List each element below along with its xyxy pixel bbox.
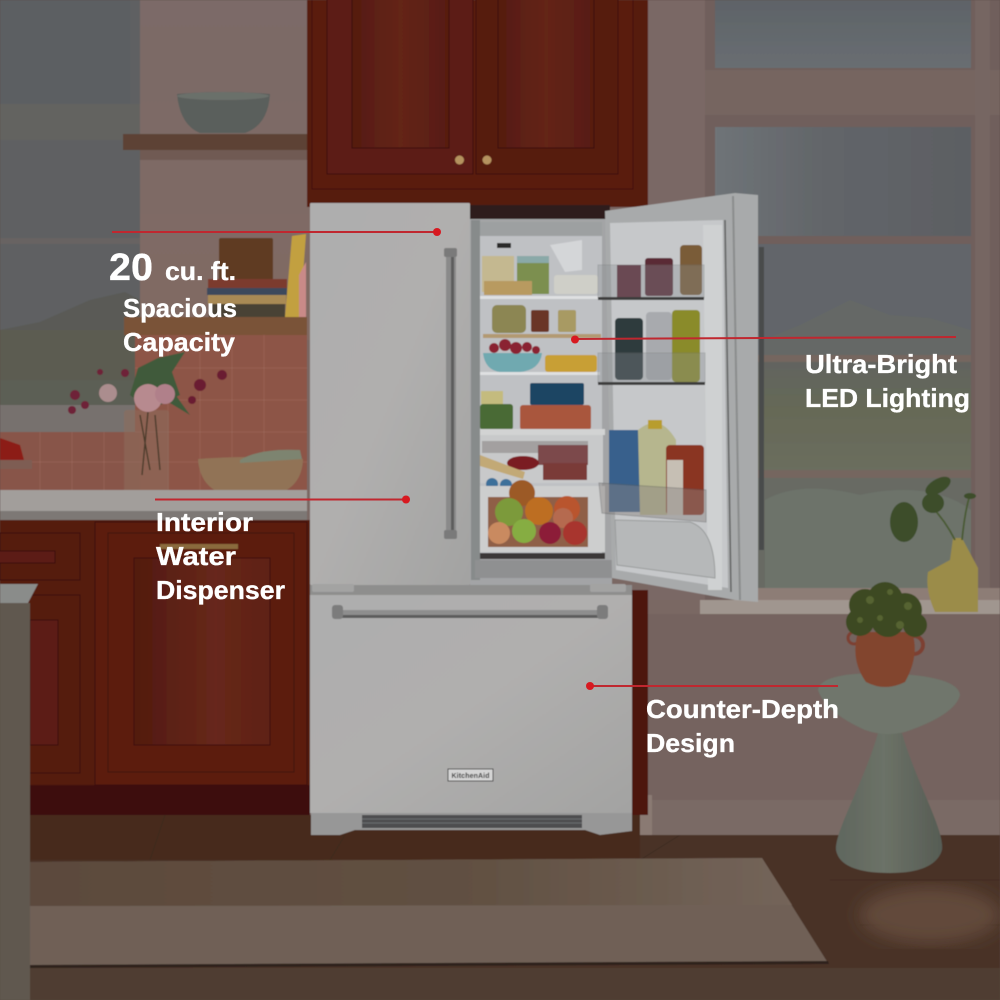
callout: water dispenser (155, 496, 410, 605)
right cabinet sliver beside fridge (630, 590, 648, 815)
books and board on shelf (207, 234, 306, 317)
door bin items (609, 245, 704, 515)
cabinet knobs (455, 156, 492, 164)
hinge band (310, 584, 632, 596)
second shelf jars (483, 305, 601, 338)
fruit stand far left (0, 438, 24, 460)
door side handle (759, 247, 764, 550)
refrigerator (310, 193, 764, 835)
callout: capacity: Spacious (123, 293, 237, 323)
window panes (715, 0, 971, 588)
lower wood shelf (124, 317, 307, 335)
open door (598, 193, 764, 602)
KitchenAid badge (448, 769, 493, 781)
callout: capacity (109, 228, 441, 357)
third shelf bowl and cheese (480, 339, 600, 375)
callout: water dispenser: Interior (156, 507, 253, 537)
fridge interior (470, 205, 615, 594)
crisper drawer with fruit (480, 480, 605, 559)
callout: capacity: 20 (109, 247, 153, 289)
left door handle (444, 248, 457, 539)
wall left (140, 0, 310, 340)
countertop (0, 490, 307, 520)
flowers in glass vase (68, 352, 227, 496)
kitchen island corner (0, 584, 38, 1000)
fourth shelf containers (480, 383, 605, 435)
backsplash tiles (0, 335, 307, 491)
rug (30, 858, 829, 968)
wooden bowl with towel (198, 450, 303, 496)
base grille (311, 813, 632, 835)
callout: water dispenser: Water (156, 541, 236, 571)
top shelf food (480, 240, 600, 299)
yellow vase with leaves (890, 473, 978, 612)
freezer drawer (310, 595, 632, 813)
callout: LED lighting: LED Lighting (805, 383, 970, 413)
callout: counter-depth: Counter-Depth (646, 694, 839, 724)
KitchenAid badge: KitchenAid (452, 773, 490, 780)
deli drawer (480, 435, 603, 491)
right wall and window (640, 0, 1000, 835)
floor (0, 815, 1000, 1000)
callout: counter-depth: Design (646, 728, 735, 758)
callout: water dispenser: Dispenser (156, 575, 285, 605)
terracotta pot with plant (846, 582, 927, 687)
upper cabinets (307, 0, 648, 207)
callout: capacity: Capacity (123, 327, 236, 357)
callout: LED lighting (571, 336, 970, 413)
freezer handle (332, 605, 608, 619)
callout: LED lighting: Ultra-Bright (805, 349, 957, 379)
upper open shelf with bowl (123, 92, 307, 160)
lower cabinets (0, 520, 310, 816)
stool side table (818, 673, 960, 873)
door bins (598, 265, 706, 522)
left French door (310, 203, 470, 585)
callout: counter-depth (586, 682, 839, 758)
left window (0, 0, 140, 432)
callout: capacity: cu. ft. (165, 256, 236, 286)
